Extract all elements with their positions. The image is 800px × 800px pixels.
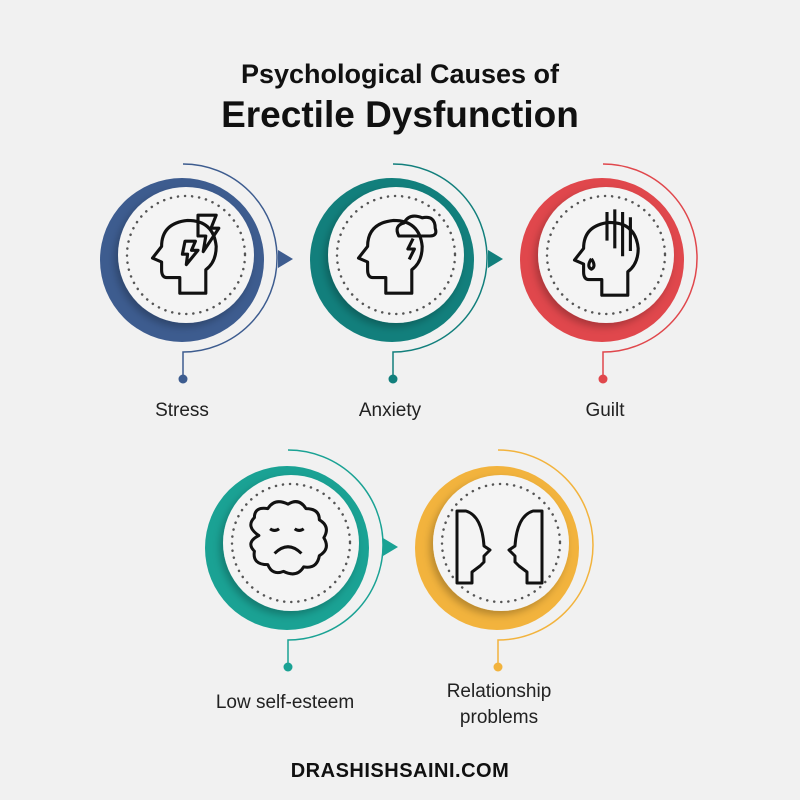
title: Erectile Dysfunction (221, 94, 579, 135)
icon: head with lightning (152, 215, 219, 293)
icon: head with storm cloud (358, 216, 436, 293)
circle: relationship problems (415, 450, 593, 672)
title (221, 59, 579, 135)
label: relationship problems (447, 681, 551, 728)
label: relationship problems: problems (460, 707, 538, 728)
circle: stress (100, 164, 293, 384)
label: relationship problems: Relationship (447, 681, 551, 702)
label: low self-esteem: Low self-esteem (216, 692, 354, 713)
circle: anxiety (310, 164, 503, 384)
icon: sad head (574, 209, 638, 295)
title: Psychological Causes of (241, 59, 559, 89)
circle: low self-esteem (205, 450, 398, 672)
label: guilt: Guilt (585, 400, 625, 421)
label: anxiety: Anxiety (359, 400, 421, 421)
circle: guilt (520, 164, 697, 384)
icon: sad brain (251, 502, 326, 574)
footer: DRASHISHSAINI.COM (291, 760, 509, 782)
icon: two faces (457, 511, 542, 583)
label: stress: Stress (155, 400, 209, 421)
